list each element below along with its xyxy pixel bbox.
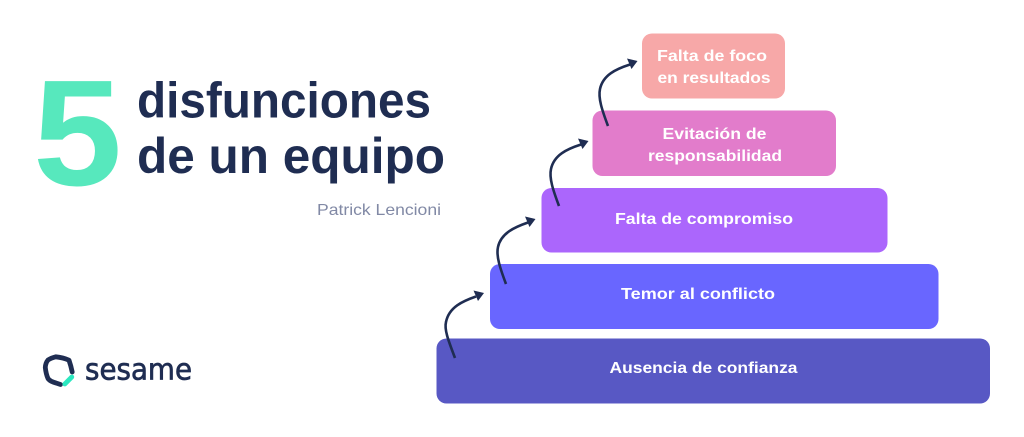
pyramid level 5 (642, 34, 785, 98)
arrow 2 (497, 216, 536, 284)
icon: sesame ring (45, 357, 72, 384)
title (137, 72, 445, 184)
pyramid level 4 (592, 110, 836, 176)
logo wordmark: sesame (85, 352, 192, 386)
pyramid level 3 (542, 188, 888, 252)
big number 5: 5 (33, 48, 122, 217)
pyramid level 4: Evitación de (662, 126, 767, 143)
arrow 3 (550, 138, 588, 206)
pyramid level 2: Temor al conflicto (621, 286, 775, 303)
pyramid level 4: responsabilidad (648, 148, 782, 165)
arrow 4 (599, 58, 638, 126)
pyramid level 1 (436, 338, 990, 404)
title: disfunciones (137, 72, 431, 128)
pyramid level 2 (490, 264, 938, 329)
pyramid level 1: Ausencia de confianza (610, 360, 798, 377)
pyramid level 3: Falta de compromiso (615, 211, 793, 228)
pyramid level 5: Falta de foco (657, 48, 767, 65)
logo: sesame (45, 352, 192, 386)
pyramid level 5: en resultados (658, 70, 771, 87)
author: Patrick Lencioni (317, 202, 441, 219)
title: de un equipo (137, 128, 445, 184)
arrow 1 (446, 290, 484, 358)
